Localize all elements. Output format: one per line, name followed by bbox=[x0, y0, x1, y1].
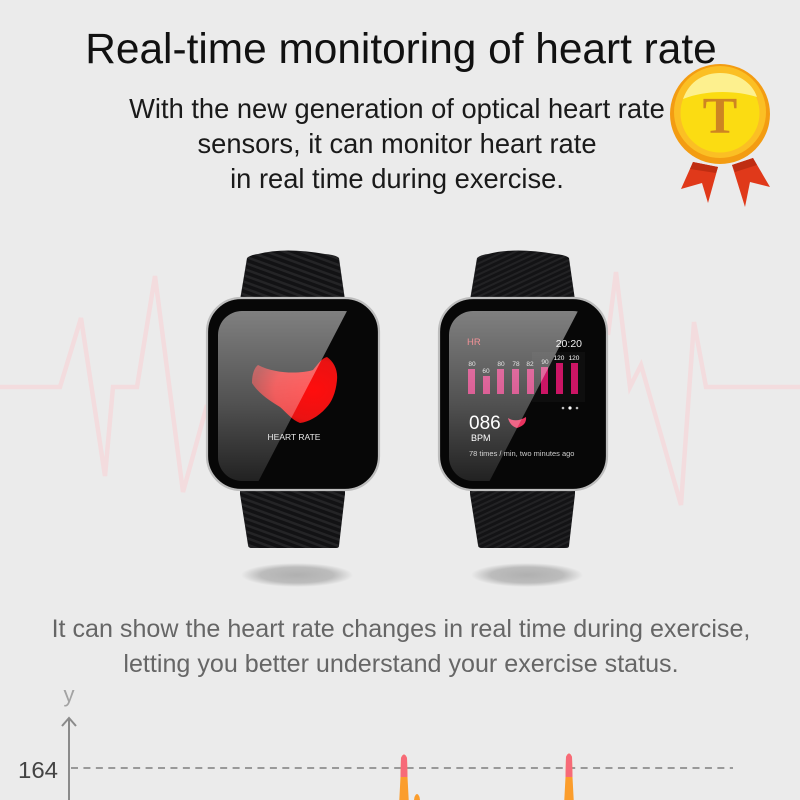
ribbon shadows bbox=[690, 158, 757, 173]
intro paragraph: sensors, it can monitor heart rate bbox=[197, 128, 597, 158]
intro paragraph bbox=[129, 92, 665, 194]
lower caption bbox=[52, 615, 750, 678]
case left bbox=[207, 298, 379, 490]
time: 20:20 bbox=[556, 338, 582, 350]
bar values: 90 bbox=[541, 359, 549, 366]
strap right bbox=[470, 250, 575, 548]
bar chart bbox=[468, 363, 578, 394]
shadow right bbox=[471, 563, 583, 587]
shadow left bbox=[241, 563, 353, 587]
bar values bbox=[468, 355, 580, 375]
watch left bbox=[207, 250, 379, 548]
label 164: 164 bbox=[18, 757, 58, 783]
label heart rate: HEART RATE bbox=[268, 432, 321, 442]
bar values: 82 bbox=[526, 361, 534, 368]
peak two bbox=[564, 754, 574, 800]
small heart bbox=[508, 417, 526, 428]
pager dots bbox=[562, 406, 578, 410]
history caption: 78 times / min, two minutes ago bbox=[469, 449, 574, 458]
intro paragraph: With the new generation of optical heart rate bbox=[129, 92, 665, 124]
bar panel bbox=[532, 352, 585, 402]
ribbon right bbox=[732, 158, 770, 207]
watch right bbox=[439, 250, 607, 548]
bar values: 120 bbox=[569, 355, 580, 362]
dashed line 164 bbox=[71, 767, 733, 769]
glare right bbox=[449, 311, 578, 481]
heart bbox=[252, 357, 337, 423]
glare left bbox=[218, 311, 347, 481]
medal rim bbox=[670, 64, 770, 164]
medal shine bbox=[683, 73, 757, 99]
peak one bbox=[399, 754, 420, 800]
ribbon left bbox=[681, 162, 718, 203]
watch right: BPM bbox=[471, 433, 491, 443]
bar values: 80 bbox=[497, 361, 505, 368]
y axis: y bbox=[64, 682, 74, 707]
case right bbox=[439, 298, 607, 490]
letter T: T bbox=[703, 88, 737, 145]
watches bbox=[206, 250, 608, 586]
lower caption: It can show the heart rate changes in real time during exercise, bbox=[52, 615, 750, 643]
intro paragraph: in real time during exercise. bbox=[230, 162, 564, 194]
HR label: HR bbox=[467, 337, 481, 348]
lower caption: letting you better understand your exercise status. bbox=[123, 650, 679, 678]
strap left bbox=[240, 250, 345, 548]
BPM reading: 086 bbox=[469, 413, 501, 434]
bar values: 78 bbox=[512, 361, 520, 368]
bar values: 60 bbox=[482, 368, 490, 375]
y axis bbox=[62, 682, 76, 800]
bar values: 80 bbox=[468, 361, 476, 368]
bar values: 120 bbox=[554, 355, 565, 362]
title: Real-time monitoring of heart rate bbox=[85, 25, 717, 72]
